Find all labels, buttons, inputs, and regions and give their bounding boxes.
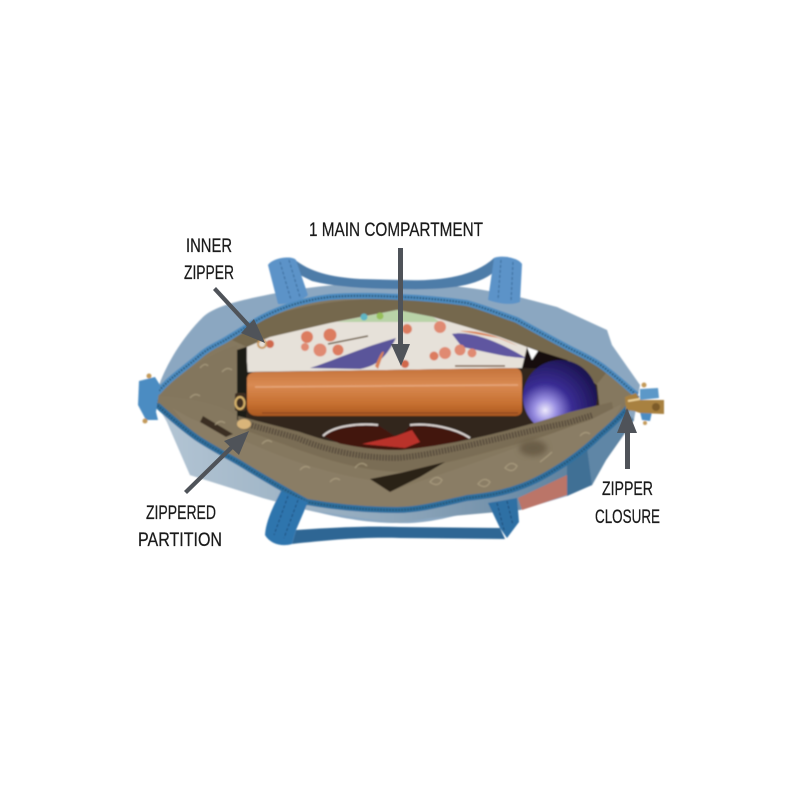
back lining band <box>232 299 607 384</box>
sunglasses <box>323 424 470 458</box>
dark side panel <box>567 448 592 496</box>
bag illustration <box>138 257 664 545</box>
label: zipper closure <box>595 479 660 528</box>
floral card <box>247 310 527 372</box>
pink patch <box>518 475 567 510</box>
partition zipper pull <box>235 393 251 429</box>
bottom strap <box>292 527 505 544</box>
left end tab <box>138 374 160 424</box>
top right handle tab <box>488 257 522 304</box>
label: inner zipper <box>184 236 234 284</box>
main zipper <box>157 296 637 510</box>
label: zipper closure: ZIPPER <box>602 479 653 500</box>
label: zippered partition: ZIPPERED <box>146 503 216 524</box>
label: inner zipper: ZIPPER <box>184 263 234 284</box>
label: zipper closure: CLOSURE <box>595 507 660 528</box>
label: zippered partition <box>138 503 222 551</box>
label: 1 main compartment: 1 MAIN COMPARTMENT <box>309 220 483 241</box>
lower front lining <box>172 364 622 510</box>
purple sphere <box>523 360 597 434</box>
zippered partition <box>238 402 614 472</box>
interior lining <box>157 296 637 510</box>
arrow: main compartment <box>391 248 410 366</box>
left inner lining <box>160 345 237 416</box>
right end tab and zipper pull <box>625 382 664 425</box>
label: zippered partition: PARTITION <box>138 530 222 551</box>
inner zipper pull <box>258 340 266 348</box>
label: inner zipper: INNER <box>186 236 232 257</box>
dark pocket <box>237 346 600 455</box>
lower body panel <box>157 405 634 523</box>
top left handle tab <box>268 258 308 304</box>
bottom right handle tab <box>488 498 519 538</box>
black gap above sphere <box>522 348 580 370</box>
bag body <box>155 282 640 523</box>
bottom left handle tab <box>265 491 308 545</box>
arrow: inner zipper <box>213 287 265 343</box>
top strap <box>294 258 494 289</box>
arrow: zipper closure <box>617 408 637 469</box>
orange tube <box>247 368 522 416</box>
arrow: zippered partition <box>184 431 249 494</box>
